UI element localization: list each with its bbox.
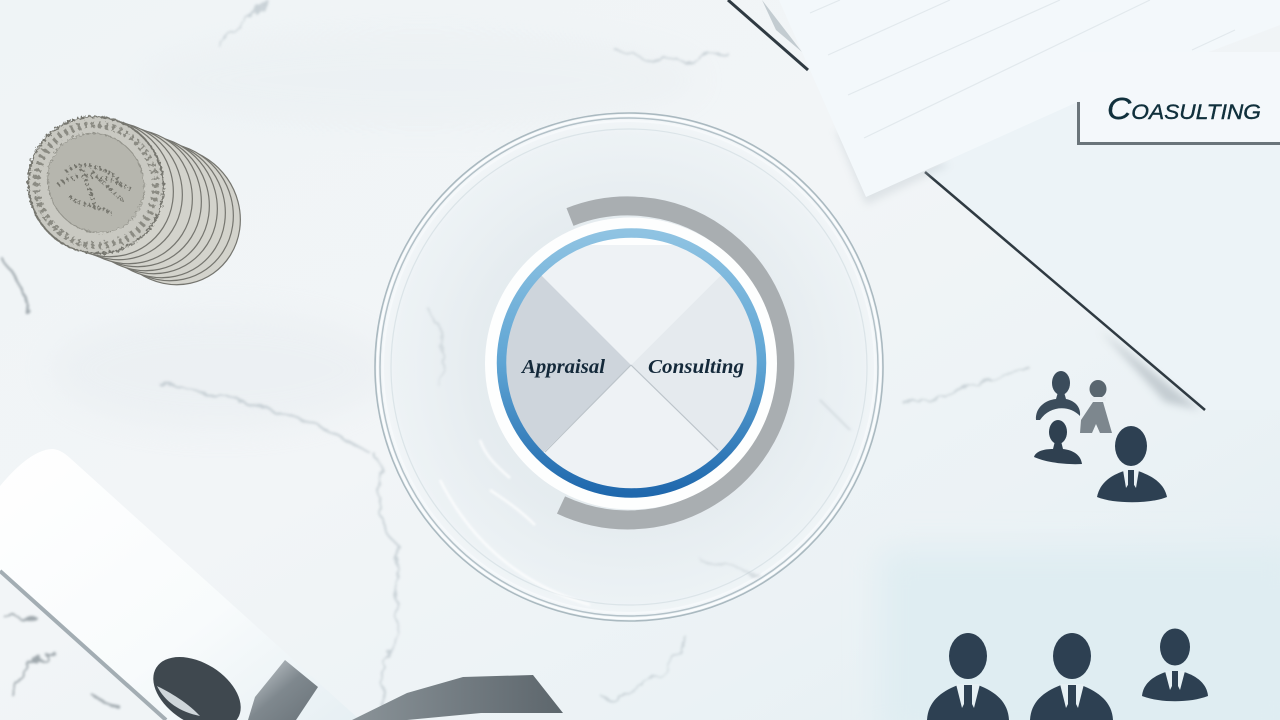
pie sector: bottom — [544, 366, 718, 488]
icon: small person top — [1036, 371, 1080, 420]
ribbon band — [248, 660, 318, 720]
ribbon loop — [140, 642, 254, 720]
icon: person bottom middle — [1030, 633, 1113, 720]
card text: COASULTING — [1107, 91, 1261, 126]
pie sector: consulting — [632, 276, 757, 452]
pie sector: appraisal — [506, 276, 631, 452]
white outer ring — [485, 218, 777, 510]
pie sector: top — [542, 245, 720, 364]
label card — [1077, 52, 1280, 145]
icon: medium person — [1097, 426, 1167, 502]
scroll with ribbon — [0, 449, 563, 720]
icon: small person lower — [1034, 420, 1082, 464]
stacked paper sheet — [779, 0, 1280, 205]
pie sectors — [506, 245, 757, 488]
coin face — [2, 90, 190, 280]
icon: small gray person — [1080, 380, 1112, 433]
ribbon tail — [352, 675, 563, 720]
underlying folder sheet — [728, 0, 1280, 410]
blue ring — [502, 233, 762, 493]
icon: person bottom right — [1142, 628, 1208, 701]
glass dish — [375, 113, 883, 621]
label: appraisal: Appraisal — [520, 356, 605, 378]
stack of coins — [2, 90, 267, 311]
circular diagram — [485, 218, 777, 510]
icon: person bottom left — [927, 633, 1009, 720]
rolled paper — [0, 449, 360, 720]
label: consulting: Consulting — [648, 356, 744, 378]
gray progress arc — [561, 206, 785, 520]
